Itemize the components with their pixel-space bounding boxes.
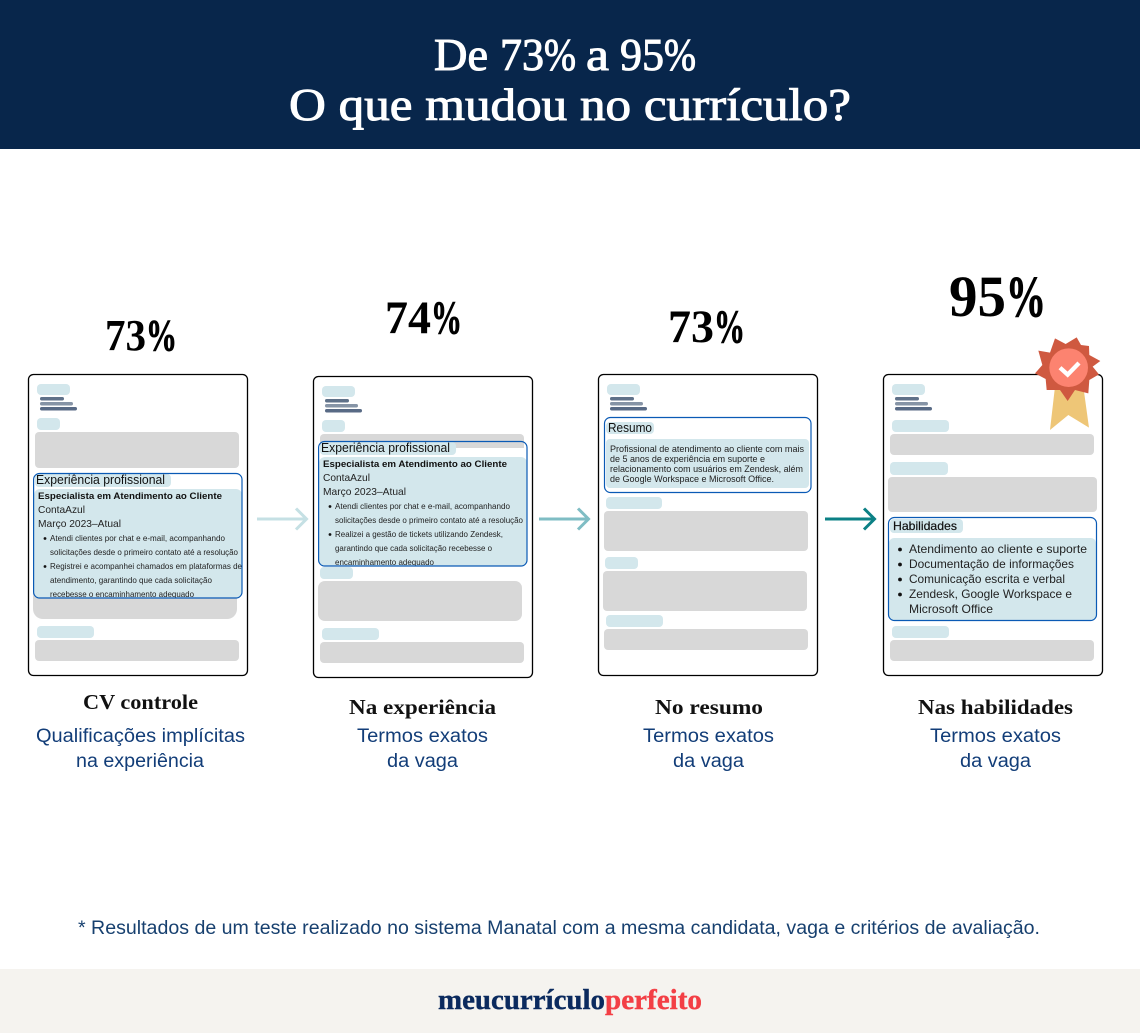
highlighted section: experiência com termos: garantindo que cada solicitação recebesse o <box>335 543 492 553</box>
score: 74% experience: 74 <box>385 292 431 344</box>
highlighted section: habilidades: Microsoft Office <box>909 602 993 616</box>
highlighted section: experiência com termos: solicitações desde o primeiro contato até a resolução <box>335 515 523 525</box>
highlighted section: resumo: Resumo <box>608 420 652 435</box>
score: 73% control: 73 <box>105 311 146 360</box>
highlighted section: experiência com termos: Especialista em Atendimento ao Cliente <box>323 459 507 470</box>
highlighted section: experiência com termos: ContaAzul <box>323 473 370 484</box>
highlighted section: experiência: Março 2023–Atual <box>38 519 121 530</box>
highlighted section: experiência: Registrei e acompanhei chamados em plataformas de <box>50 561 242 571</box>
footnote: * Resultados de um teste realizado no sistema Manatal com a mesma candidata, vaga e critérios de avaliação. <box>78 918 1040 939</box>
highlighted section: experiência: solicitações desde o primeiro contato até a resolução <box>50 547 238 557</box>
score: 73% summary: % <box>714 301 745 353</box>
highlighted section: resumo: de Google Workspace e Microsoft Office. <box>610 474 774 484</box>
arrow: summary to skills <box>825 508 874 530</box>
icon: award medal <box>1035 337 1100 430</box>
highlighted section: experiência com termos: encaminhamento adequado <box>335 557 434 567</box>
score: 73% control: % <box>146 311 177 360</box>
caption: Nas habilidades: da vaga <box>960 751 1031 772</box>
highlighted section: experiência: atendimento, garantindo que cada solicitação <box>50 575 212 585</box>
panel: No resumo resume <box>598 374 818 676</box>
highlighted section: experiência com termos: Atendi clientes por chat e e-mail, acompanhando <box>335 501 510 511</box>
highlighted section: experiência <box>34 472 242 599</box>
header band with title: % <box>664 29 696 80</box>
highlighted section: experiência com termos: Março 2023–Atual <box>323 487 406 498</box>
highlighted section: experiência: Experiência profissional <box>36 472 165 487</box>
caption: CV controle: na experiência <box>76 751 204 772</box>
header band with title: De <box>434 29 488 80</box>
highlighted section: habilidades <box>888 518 1096 620</box>
highlighted section: habilidades: Habilidades <box>893 519 957 533</box>
highlighted section: experiência: Especialista em Atendimento ao Cliente <box>38 491 222 502</box>
highlighted section: experiência: Atendi clientes por chat e e-mail, acompanhando <box>50 533 225 543</box>
header band with title <box>0 0 1140 149</box>
highlighted section: experiência com termos: Realizei a gestão de tickets utilizando Zendesk, <box>335 529 503 539</box>
score: 95% skills <box>949 264 1046 329</box>
caption: Nas habilidades: Termos exatos <box>930 726 1061 747</box>
score: 73% control <box>105 311 177 360</box>
caption: Na experiência <box>349 695 497 772</box>
arrow: experience to summary <box>539 508 588 530</box>
caption: CV controle: Qualificações implícitas <box>36 726 245 747</box>
arrow: control to experience <box>257 508 306 530</box>
highlighted section: habilidades: Documentação de informações <box>909 557 1074 571</box>
footer with logo: perfeito <box>605 985 702 1016</box>
header band with title: % <box>544 29 576 80</box>
caption: No resumo <box>643 695 774 772</box>
caption: No resumo: da vaga <box>673 751 744 772</box>
caption: CV controle: CV controle <box>83 690 198 714</box>
caption: CV controle <box>36 690 245 772</box>
caption: Na experiência: Na experiência <box>349 695 497 719</box>
highlighted section: experiência com termos <box>319 440 527 567</box>
header band with title: O que mudou no currículo? <box>289 79 851 130</box>
footer with logo: meucurrículo <box>438 985 605 1016</box>
footer with logo <box>0 969 1140 1033</box>
score: 74% experience: % <box>431 292 462 344</box>
score: 73% summary <box>668 301 745 353</box>
score: 95% skills: % <box>1006 264 1046 329</box>
score: 74% experience <box>385 292 462 344</box>
highlighted section: resumo: relacionamento com usuários em Zendesk, além <box>610 464 803 474</box>
highlighted section: experiência com termos: Experiência profissional <box>321 440 450 455</box>
caption: No resumo: No resumo <box>655 695 763 719</box>
caption: No resumo: Termos exatos <box>643 726 774 747</box>
score: 95% skills: 95 <box>949 264 1006 329</box>
header band with title: 95 <box>620 29 664 80</box>
highlighted section: resumo: de 5 anos de experiência em suporte e <box>610 454 765 464</box>
highlighted section: resumo: Profissional de atendimento ao cliente com mais <box>610 444 804 454</box>
panel: Nas habilidades resume <box>884 374 1102 676</box>
caption: Nas habilidades <box>918 695 1073 772</box>
highlighted section: habilidades: Zendesk, Google Workspace e <box>909 587 1072 601</box>
caption: Na experiência: Termos exatos <box>357 726 488 747</box>
highlighted section: experiência: recebesse o encaminhamento adequado <box>50 589 194 599</box>
header band with title: 73 <box>500 29 544 80</box>
panel: CV controle resume <box>28 374 248 676</box>
highlighted section: habilidades: Atendimento ao cliente e suporte <box>909 542 1087 556</box>
caption: Na experiência: da vaga <box>387 751 458 772</box>
header band with title: a <box>586 29 609 80</box>
panel: Na experiência resume <box>314 376 532 678</box>
highlighted section: habilidades: Comunicação escrita e verbal <box>909 572 1065 586</box>
caption: Nas habilidades: Nas habilidades <box>918 695 1073 719</box>
highlighted section: resumo <box>604 418 811 492</box>
highlighted section: experiência: ContaAzul <box>38 505 85 516</box>
score: 73% summary: 73 <box>668 301 714 353</box>
